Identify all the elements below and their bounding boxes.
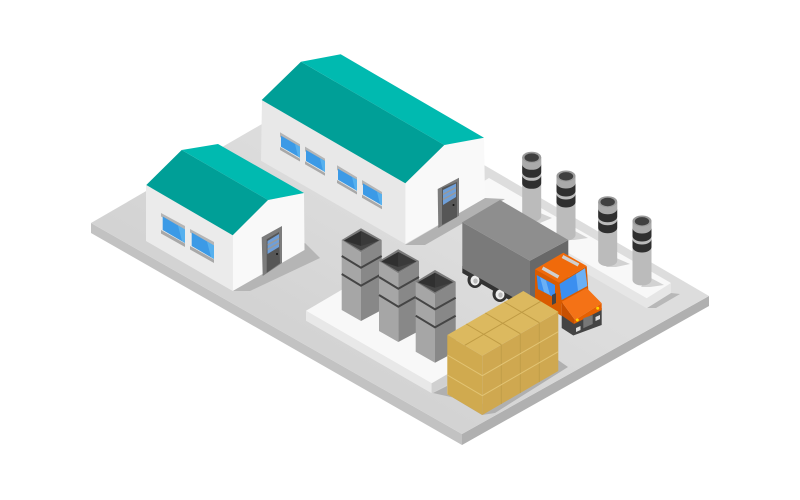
grille bbox=[583, 315, 593, 328]
truck bbox=[462, 200, 602, 336]
chimney platform bbox=[465, 178, 680, 308]
bumper and grille base bbox=[562, 308, 602, 336]
window 1 bbox=[161, 213, 185, 247]
box seams bbox=[465, 301, 541, 404]
concrete columns bbox=[342, 228, 456, 363]
chimney 3 bbox=[598, 196, 617, 266]
window 2 bbox=[190, 229, 214, 263]
door bbox=[438, 178, 459, 228]
roof bbox=[262, 54, 484, 183]
roof strips bbox=[542, 256, 578, 277]
cab side bbox=[535, 269, 562, 316]
cab front bbox=[559, 266, 588, 304]
window 4 bbox=[362, 180, 382, 209]
gable wall bbox=[405, 138, 485, 244]
small building shadow bbox=[233, 243, 320, 291]
cardboard box stack bbox=[447, 291, 558, 415]
roof bbox=[146, 144, 304, 235]
headlights bbox=[576, 318, 579, 322]
door bbox=[262, 226, 282, 276]
column 2 bbox=[379, 249, 419, 342]
side window bbox=[537, 275, 555, 298]
left wall bbox=[261, 100, 405, 244]
column 1 bbox=[342, 228, 382, 321]
hood front bbox=[574, 303, 602, 324]
boxes shadow bbox=[433, 360, 568, 415]
window 3 bbox=[337, 165, 357, 194]
wheel rear bbox=[468, 272, 482, 288]
small building bbox=[146, 144, 304, 291]
left wall bbox=[146, 185, 233, 291]
windshield bbox=[560, 268, 587, 300]
window 2 bbox=[305, 147, 325, 176]
mirror bbox=[552, 293, 556, 305]
ground platform bbox=[91, 80, 709, 445]
gable wall bbox=[233, 193, 304, 291]
big building bbox=[261, 54, 485, 244]
hood top bbox=[562, 288, 602, 320]
big building shadow bbox=[405, 198, 505, 245]
cab bbox=[535, 253, 602, 336]
chimneys bbox=[522, 152, 664, 287]
block platform bbox=[306, 282, 480, 393]
window 1 bbox=[280, 132, 300, 162]
cargo box bbox=[462, 200, 568, 307]
wheel front bbox=[492, 286, 508, 302]
column 3 bbox=[416, 270, 456, 363]
cab roof bbox=[535, 253, 587, 283]
chimney 2 bbox=[556, 170, 576, 240]
hood side bbox=[562, 302, 575, 324]
chimney shadows bbox=[530, 212, 664, 287]
chassis bbox=[462, 266, 532, 313]
chimney 4 bbox=[632, 216, 652, 286]
chimney 1 bbox=[522, 152, 541, 222]
